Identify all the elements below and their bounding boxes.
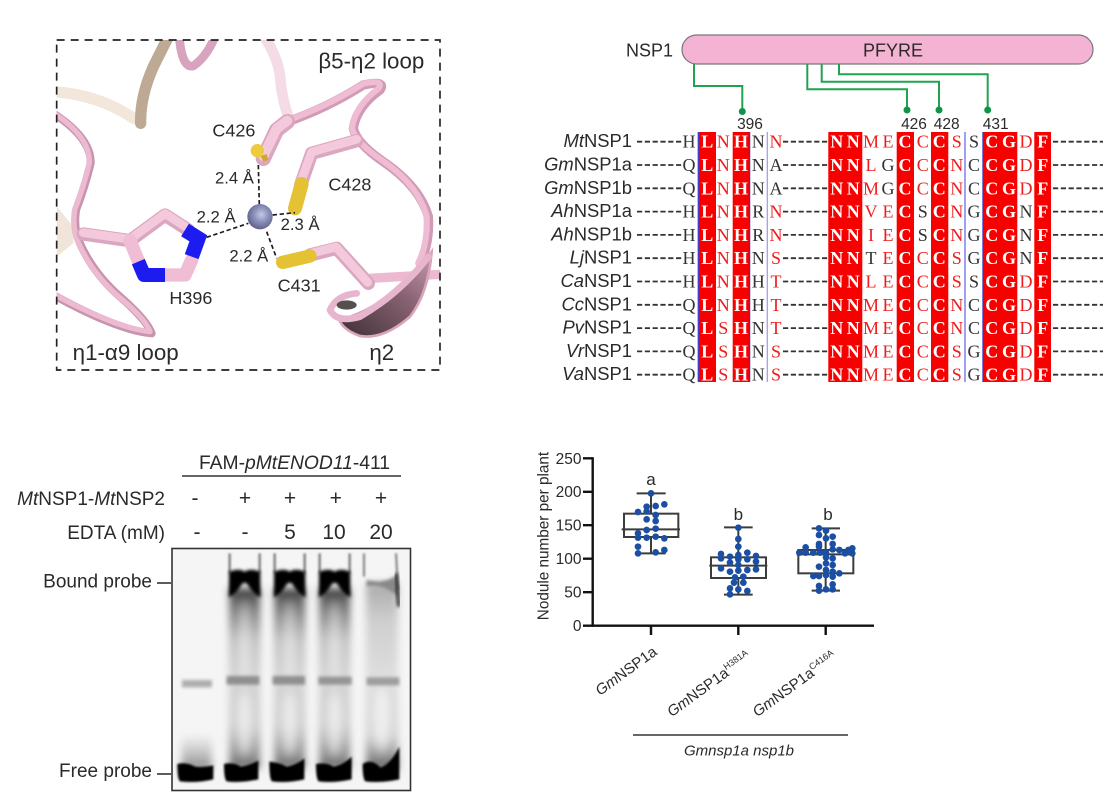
marker: free probe: Free probe (59, 761, 152, 782)
sequence row: VrNSP1: LHNNCCCGF (701, 341, 1048, 361)
sequence row: LjNSP1: LHNNCCCGF (701, 248, 1048, 268)
residue and distance labels: C426 (212, 121, 255, 141)
stick: C431 (283, 247, 368, 283)
sequence row: GmNSP1a (544, 154, 1048, 175)
significance letters: b (734, 505, 743, 524)
y tick labels: 0 (573, 618, 582, 635)
sequence row: GmNSP1b: GmNSP1b (544, 177, 632, 198)
sequence row: AhNSP1b (550, 223, 1048, 245)
lane 1 (177, 680, 213, 782)
condition row: protein (17, 487, 387, 510)
lane 3 (269, 553, 305, 782)
alignment block boundaries (698, 132, 983, 382)
marker: bound probe: Bound probe (43, 572, 152, 593)
y tick labels: 150 (556, 518, 582, 535)
sequence row: LjNSP1: HNTGN (682, 248, 1032, 268)
connector: residue 431: 431 (983, 116, 1009, 133)
eta2 helix (330, 252, 447, 337)
gel image (172, 548, 410, 790)
condition row: protein: - (192, 487, 198, 510)
x label: GmNSP1a H381A: GmNSP1a (664, 665, 732, 721)
condition row: protein: + (330, 487, 342, 510)
left ribbon (53, 113, 152, 333)
sequence row: PvNSP1: PvNSP1 (562, 317, 632, 338)
sequence row: CcNSP1 (561, 293, 1048, 315)
sequence row: GmNSP1b: QNAGC (682, 178, 980, 198)
panel: EMSA gel (17, 453, 410, 790)
sequence row: MtNSP1: HNS (682, 132, 979, 152)
stick: C426 (251, 121, 287, 162)
sequence row: CcNSP1: NTMECND (717, 295, 1032, 315)
sequence row: GmNSP1a: NLCND (717, 155, 1032, 175)
zinc ion (247, 204, 273, 229)
sequence row: CcNSP1: QHC (682, 295, 980, 315)
sequence row: LjNSP1 (570, 247, 1048, 268)
condition row: EDTA: 20 (369, 521, 393, 544)
condition row: EDTA: 10 (322, 521, 346, 544)
sequence row: AhNSP1a: NNVEN (717, 202, 963, 222)
sequence row: GmNSP1a: QNAGC (682, 155, 980, 175)
sequence row: MtNSP1: MtNSP1 (564, 130, 632, 151)
data points: GmNSP1a (635, 490, 668, 557)
sequence row: AhNSP1b: HRSGN (682, 225, 1032, 245)
sequence row: VaNSP1: QNG (682, 365, 980, 385)
sequence row: AhNSP1a (550, 200, 1048, 222)
lane 2 (224, 553, 260, 782)
y tick labels: 200 (556, 484, 582, 501)
residue and distance labels: 2.3 Å (281, 215, 320, 234)
sequence row: AhNSP1a: HRSGN (682, 202, 1032, 222)
significance letters: b (823, 505, 833, 524)
residue and distance labels: 2.2 Å (229, 247, 269, 266)
condition row: protein: + (239, 487, 251, 510)
sequence row: VaNSP1: SSMECSD (718, 365, 1032, 385)
label: NSP1: NSP1 (626, 40, 673, 60)
condition row: protein: + (284, 487, 296, 510)
connector: residue 426 (807, 64, 927, 133)
sequence row: CaNSP1 (560, 270, 1048, 292)
loop labels: η1-α9 loop (73, 340, 179, 365)
PFYRE domain bar (682, 35, 1093, 64)
panel: zinc-binding site structure (53, 35, 447, 370)
axes (583, 457, 874, 635)
condition row: EDTA: 5 (284, 521, 296, 544)
box: GmNSP1a (622, 493, 680, 553)
box: GmNSP1a H381A (709, 527, 767, 595)
sequence row: CaNSP1: NTLECSD (717, 272, 1032, 292)
connector: residue 396 (694, 64, 763, 133)
tan background ribbon (53, 37, 168, 257)
y tick labels: 250 (556, 451, 582, 468)
sequence row: GmNSP1a: LHNNCCCGF (701, 155, 1048, 175)
coordination bonds (207, 165, 295, 258)
gap dashes (637, 142, 1103, 375)
box: GmNSP1a C416A (797, 528, 855, 591)
residue and distance labels: 2.4 Å (215, 168, 255, 187)
residue and distance labels: H396 (169, 288, 212, 308)
residue and distance labels: 2.2 Å (197, 207, 236, 226)
sequence row: LjNSP1: NSECS (717, 248, 962, 268)
condition row: EDTA: EDTA (mM) (67, 523, 165, 544)
sequence row: AhNSP1a: LHNNCCCGF (701, 202, 1048, 222)
residue and distance labels: C431 (278, 276, 321, 296)
sequence row: CcNSP1: LHNNCCCGF (701, 295, 1048, 315)
sequence row: MtNSP1 (564, 130, 1048, 152)
connector: residue 431 (839, 64, 1009, 133)
loop labels (73, 48, 424, 365)
stick: C428 (295, 139, 357, 208)
sequence row: VrNSP1: VrNSP1 (566, 340, 632, 361)
data points: GmNSP1a C416A (796, 525, 856, 594)
sequence row: AhNSP1b: NNIEN (717, 225, 963, 245)
x label: GmNSP1a C416A: GmNSP1a (750, 665, 818, 721)
loop labels: η2 (369, 340, 394, 365)
panel: nodule number box plot (536, 451, 874, 760)
probe heading: FAM-pMtENOD11-411 (199, 453, 390, 474)
sequence row: PvNSP1: STMECND (718, 318, 1032, 338)
sequence row: CaNSP1: LHNNCCCGF (701, 272, 1048, 292)
sequence row: VaNSP1: VaNSP1 (562, 363, 632, 384)
sequence row: MtNSP1: NNMECSD (717, 132, 1032, 152)
condition row: protein: + (375, 487, 387, 510)
main beta5-eta2 loop ribbon (285, 82, 429, 263)
conserved residue columns (699, 132, 1051, 382)
connector: residue 428: 428 (934, 116, 960, 133)
y tick labels (556, 451, 582, 635)
significance letters (646, 470, 833, 524)
x label: GmNSP1a C416A: C416A (807, 648, 835, 672)
sequence row: PvNSP1: QNC (682, 318, 980, 338)
sequence row: VrNSP1: QNG (682, 341, 980, 361)
significance letters: a (646, 470, 656, 489)
sequence row: PvNSP1 (562, 317, 1048, 338)
sequence row: GmNSP1b: NMCND (717, 178, 1032, 198)
x label: GmNSP1a H381A: H381A (721, 648, 750, 672)
sequence row: CaNSP1: CaNSP1 (560, 270, 632, 291)
lane 4 (316, 553, 352, 782)
y axis title: Nodule number per plant (536, 451, 552, 620)
sequence row: GmNSP1b: LHNNCCCGF (701, 178, 1048, 198)
condition row: EDTA: - (194, 521, 200, 544)
sequence row: GmNSP1b (544, 177, 1048, 198)
sequence row: AhNSP1a: AhNSP1a (550, 200, 633, 221)
dashed frame (57, 40, 440, 370)
panel: NSP1 domain and sequence alignment (544, 35, 1103, 385)
residue and distance labels (169, 121, 371, 308)
sequence row: VaNSP1: LHNNCCCGF (701, 365, 1048, 385)
x label: GmNSP1a: GmNSP1a (592, 643, 661, 699)
genotype bracket: Gmnsp1a nsp1b (684, 743, 794, 760)
pink top loop (179, 37, 215, 66)
sequence row: VaNSP1 (562, 363, 1048, 385)
sequence row: LjNSP1: LjNSP1 (570, 247, 632, 268)
sequence row: CaNSP1: HHS (682, 272, 979, 292)
sequence row: AhNSP1b: LHNNCCCGF (701, 225, 1048, 245)
y tick labels: 100 (556, 551, 582, 568)
connector: residue 396: 396 (737, 116, 763, 133)
light pink ribbon (263, 35, 288, 117)
sequence row: VrNSP1: SSMECSD (718, 341, 1032, 361)
y tick labels: 50 (564, 585, 582, 602)
data points: GmNSP1a H381A (718, 524, 759, 598)
connector: residue 426: 426 (901, 116, 927, 133)
residue and distance labels: C428 (328, 175, 371, 195)
loop labels: β5-η2 loop (318, 48, 424, 73)
stick: H396 imidazole (83, 214, 198, 275)
sequence row: PvNSP1: LHNNCCCGF (701, 318, 1048, 338)
condition row: EDTA (67, 521, 393, 544)
connector: residue 428 (822, 64, 960, 133)
sequence row: GmNSP1a: GmNSP1a (544, 154, 633, 174)
PFYRE domain bar: PFYRE (863, 40, 923, 60)
lane 5 (363, 553, 399, 782)
condition row: protein: MtNSP1-MtNSP2 (17, 489, 165, 510)
sequence row: MtNSP1: LHNNCCCGF (701, 132, 1048, 152)
sequence row: AhNSP1b: AhNSP1b (550, 223, 632, 244)
sequence row: CcNSP1: CcNSP1 (561, 293, 632, 314)
condition row: EDTA: - (242, 521, 248, 544)
sequence row: VrNSP1 (566, 340, 1048, 361)
